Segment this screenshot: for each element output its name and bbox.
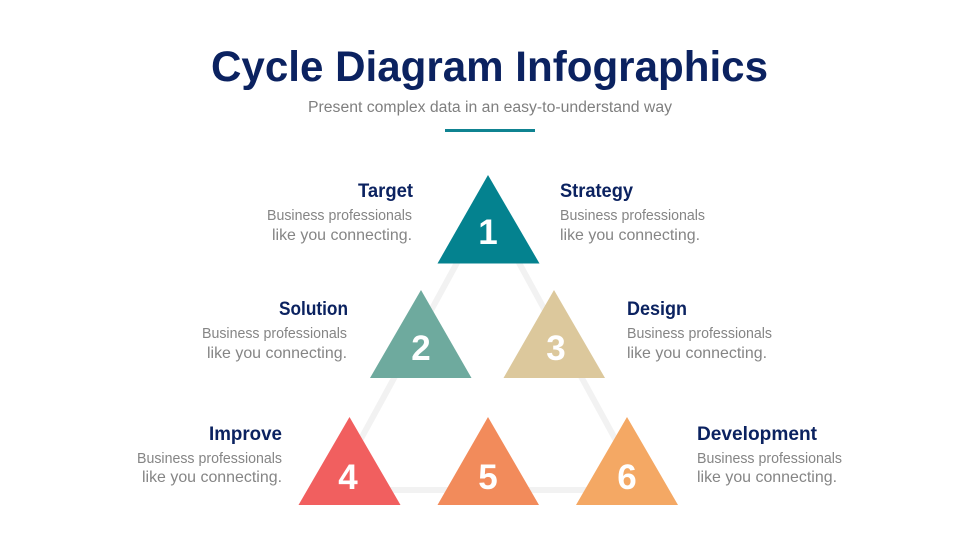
subtitle: Present complex data in an easy-to-understand way xyxy=(308,99,672,116)
step 2 triangle xyxy=(370,290,472,378)
text block: Improve: Business professionals xyxy=(137,451,282,467)
text block: Target xyxy=(267,181,414,244)
step 5 triangle: 5 xyxy=(478,458,498,497)
step 1 triangle xyxy=(438,175,540,264)
step 2 triangle: 2 xyxy=(411,329,431,368)
text block: Target: Target xyxy=(358,181,414,202)
text block: Target: like you connecting. xyxy=(272,227,412,244)
text block: Development: like you connecting. xyxy=(697,469,837,486)
step 4 triangle xyxy=(298,417,400,505)
connector triangle xyxy=(333,206,643,490)
text block: Improve xyxy=(137,424,282,486)
text block: Improve: Improve xyxy=(209,424,282,445)
text block: Solution: Solution xyxy=(279,299,348,320)
text block: Design: Business professionals xyxy=(627,326,772,342)
text block: Design: Design xyxy=(627,299,687,320)
text block: Design: like you connecting. xyxy=(627,345,767,362)
step 3 triangle: 3 xyxy=(546,329,566,368)
title: Cycle Diagram Infographics xyxy=(211,43,768,91)
text block: Strategy: Strategy xyxy=(560,181,633,202)
text block: Development xyxy=(697,424,842,486)
text block: Solution: Business professionals xyxy=(202,326,347,342)
step 3 triangle xyxy=(504,290,605,378)
step 5 triangle xyxy=(438,417,539,505)
text block: Strategy: Business professionals xyxy=(560,208,705,224)
text block: Solution: like you connecting. xyxy=(207,345,347,362)
step 6 triangle: 6 xyxy=(617,458,637,497)
step 1 triangle: 1 xyxy=(478,213,498,252)
text block: Development: Development xyxy=(697,424,818,445)
text block: Solution xyxy=(202,299,348,362)
step 4 triangle: 4 xyxy=(338,458,358,497)
text block: Target: Business professionals xyxy=(267,208,412,224)
text block: Design xyxy=(627,299,772,362)
step 6 triangle xyxy=(576,417,678,505)
title underline xyxy=(445,129,535,132)
text block: Development: Business professionals xyxy=(697,451,842,467)
text block: Improve: like you connecting. xyxy=(142,469,282,486)
text block: Strategy: like you connecting. xyxy=(560,227,700,244)
text block: Strategy xyxy=(560,181,705,244)
